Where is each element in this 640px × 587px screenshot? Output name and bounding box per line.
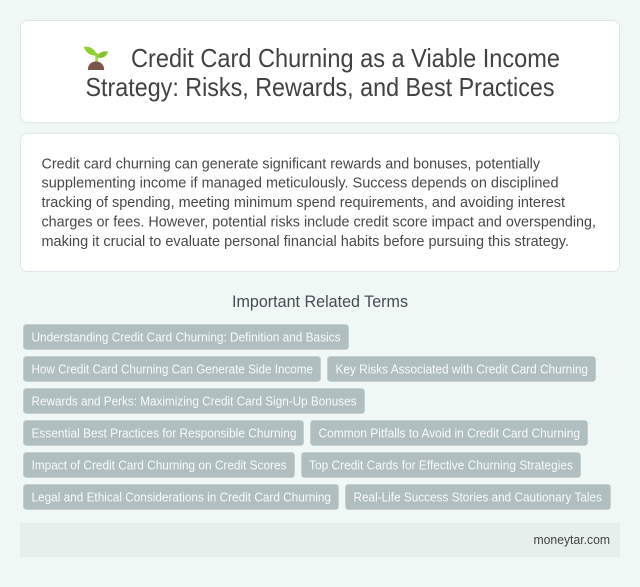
footer source: moneytar.com: [534, 532, 610, 547]
chip: legal: Legal and Ethical Considerations in Credit Card Churning: [32, 490, 331, 504]
footer: [20, 523, 620, 557]
chip: pitfalls: Common Pitfalls to Avoid in Credit Card Churning: [318, 426, 580, 440]
chip: best practices: Essential Best Practices for Responsible Churning: [32, 426, 296, 440]
chip: real-life: [346, 484, 610, 510]
panel: intro text card: [20, 134, 620, 272]
title text: Credit Card Churning as a Viable Income: [131, 43, 560, 73]
chip: key risks: [328, 356, 596, 382]
chip: key risks: Key Risks Associated with Credit Card Churning: [336, 362, 588, 376]
intro paragraph: making it crucial to evaluate personal financial habits before pursuing this strategy.: [42, 233, 569, 250]
chip: credit scores: [24, 452, 294, 478]
chip: top cards: Top Credit Cards for Effective Churning Strategies: [309, 458, 573, 472]
chip: side income: [24, 356, 320, 382]
intro paragraph: [42, 155, 596, 250]
chip: rewards: [24, 388, 364, 414]
chip: side income: How Credit Card Churning Can Generate Side Income: [32, 362, 313, 376]
panel: title card: [20, 20, 620, 122]
chip: legal: [24, 484, 338, 510]
icon: seedling: [84, 47, 108, 70]
title text: Strategy: Risks, Rewards, and Best Practices: [86, 72, 554, 102]
chip: best practices: [24, 420, 304, 446]
chip: understanding: [24, 324, 348, 350]
heading: important related terms: Important Related Terms: [232, 293, 408, 311]
chip: rewards: Rewards and Perks: Maximizing Credit Card Sign-Up Bonuses: [32, 394, 357, 408]
intro paragraph: Credit card churning can generate significant rewards and bonuses, potentially: [42, 155, 540, 172]
intro paragraph: charges or fees. However, potential risks include credit score impact and overspending,: [42, 213, 596, 230]
intro paragraph: tracking of spending, meeting minimum spend requirements, and avoiding interest: [42, 194, 566, 211]
chip: understanding: Understanding Credit Card Churning: Definition and Basics: [32, 330, 341, 344]
related terms chips: [24, 324, 610, 510]
chip: credit scores: Impact of Credit Card Churning on Credit Scores: [32, 458, 287, 472]
chip: pitfalls: [310, 420, 588, 446]
intro paragraph: supplementing income if managed meticulously. Success depends on disciplined: [42, 174, 558, 192]
chip: real-life: Real-Life Success Stories and Cautionary Tales: [354, 490, 602, 504]
chip: top cards: [302, 452, 580, 478]
title text: [86, 43, 560, 102]
